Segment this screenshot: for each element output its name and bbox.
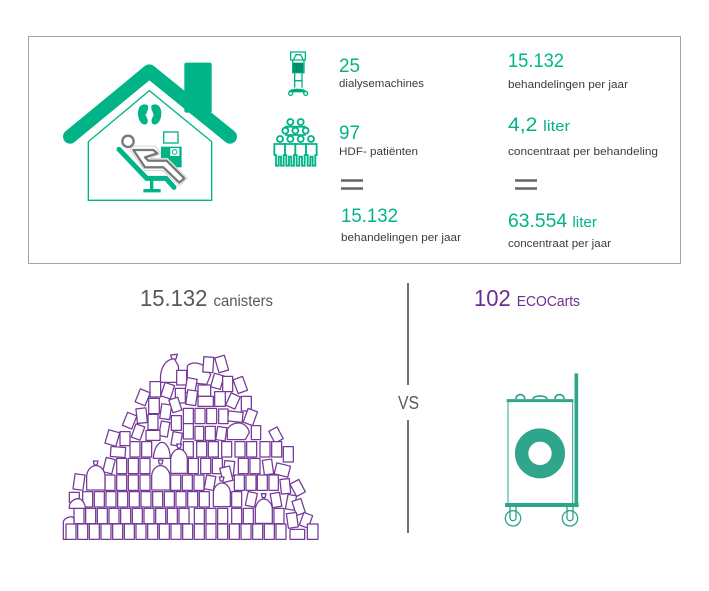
illustration: pile of canisters	[63, 354, 318, 539]
stat: 25 dialysis machines: dialysemachines	[339, 78, 425, 90]
stat: treatments per year left	[341, 206, 461, 244]
icon: dialysis machine	[289, 52, 308, 95]
stat: liters per treatment: concentraat per behandeling	[508, 146, 658, 158]
illustration: ECOCart	[505, 373, 579, 526]
stat: treatments per year left: behandelingen per jaar	[341, 232, 461, 244]
stat: 25 dialysis machines	[339, 56, 425, 90]
bagged canisters	[87, 442, 272, 523]
stat: treatments per year right: 15.132	[508, 51, 564, 72]
panel: home dialysis summary	[28, 36, 680, 264]
icon: house with patient on dialysis	[70, 63, 230, 200]
equals sign right	[515, 180, 537, 188]
stat: 25 dialysis machines: 25	[339, 56, 360, 77]
stat: liters per year: 63.554 liter	[508, 211, 597, 232]
stat: treatments per year left: 15.132	[341, 206, 398, 227]
stat: treatments per year right	[508, 51, 628, 91]
stat: liters per year	[508, 211, 611, 250]
heading: canisters: 15.132 canisters	[140, 285, 273, 311]
stacked canisters	[130, 442, 293, 462]
stat: 97 HDF patients	[339, 123, 418, 158]
stat: liters per treatment	[508, 115, 658, 158]
stat: liters per year: concentraat per jaar	[508, 238, 611, 250]
stat: 97 HDF patients: HDF- patiënten	[339, 146, 418, 158]
stat: liters per treatment: 4,2 liter	[508, 115, 570, 136]
heading: ECOCarts: 102 ECOCarts	[474, 285, 580, 311]
upper tilted canisters	[105, 354, 283, 446]
icon: group of patients	[274, 119, 317, 166]
stat: 97 HDF patients: 97	[339, 123, 360, 144]
stat: treatments per year right: behandelingen per jaar	[508, 79, 628, 91]
divider with VS: VS	[398, 393, 419, 413]
equals sign left	[341, 180, 363, 188]
